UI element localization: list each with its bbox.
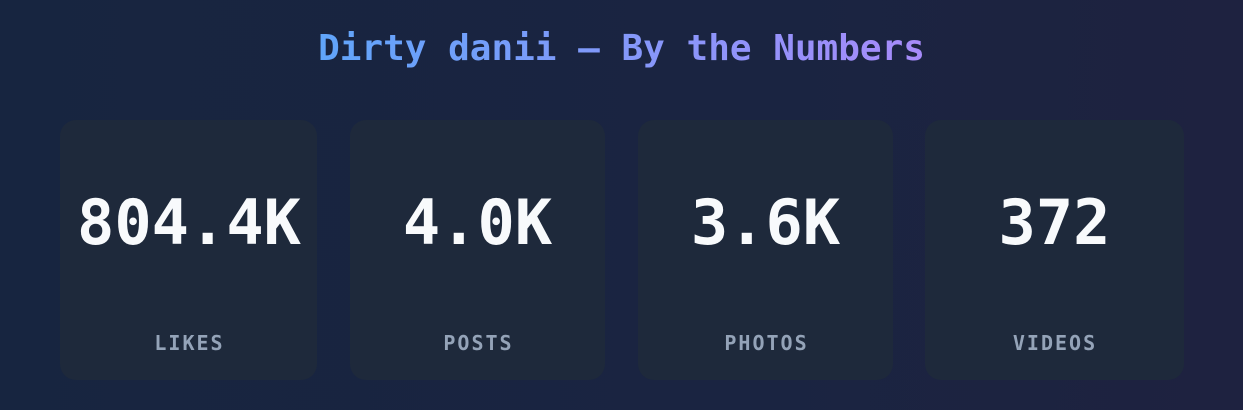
value: likes: 804.4K <box>77 186 301 259</box>
panel: likes <box>60 120 317 380</box>
value: posts: 4.0K <box>403 186 552 259</box>
panel: videos <box>925 120 1184 380</box>
label: photos: PHOTOS <box>724 331 809 355</box>
panel: posts <box>350 120 605 380</box>
label: likes: LIKES <box>154 331 225 355</box>
value: videos: 372 <box>998 186 1110 259</box>
label: videos: VIDEOS <box>1013 331 1097 355</box>
label: posts: POSTS <box>443 331 514 355</box>
title: Dirty danii — By the Numbers <box>318 28 925 69</box>
panel: photos <box>638 120 893 380</box>
value: photos: 3.6K <box>691 186 840 259</box>
